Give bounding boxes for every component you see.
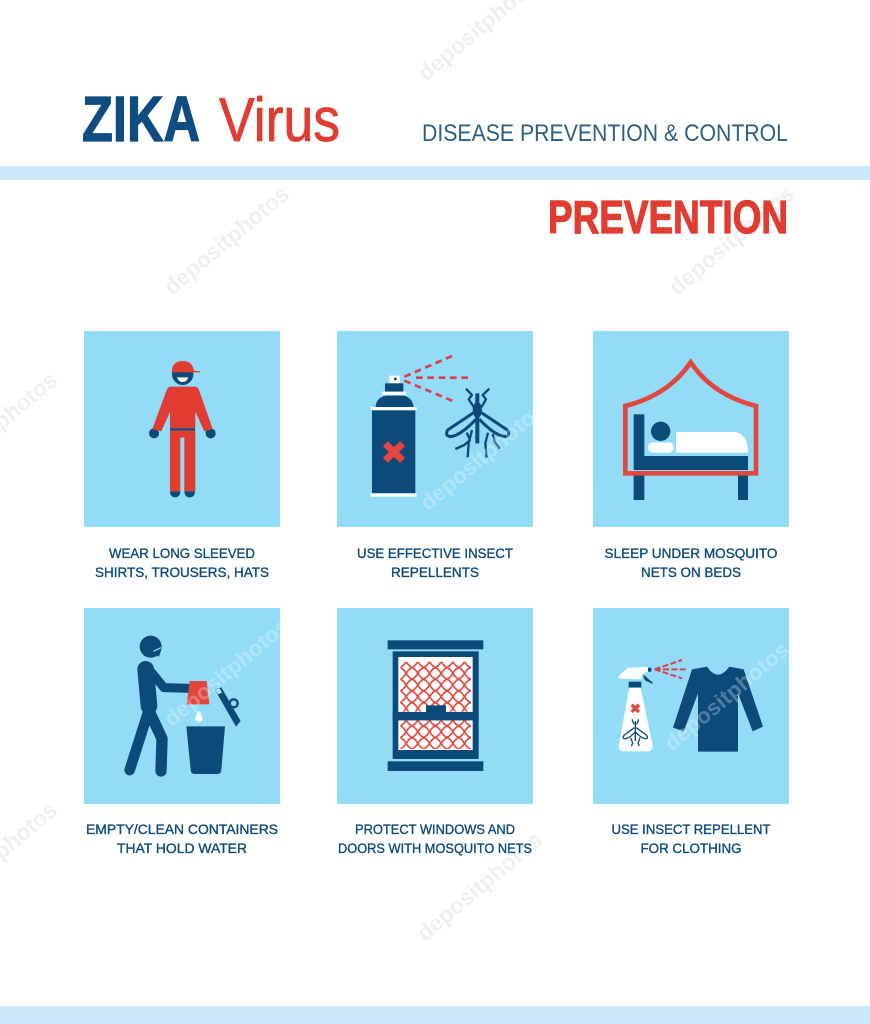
icon: person emptying container xyxy=(130,636,241,774)
caption: insect repellent xyxy=(357,545,513,580)
subtitle: DISEASE PREVENTION & CONTROL xyxy=(422,120,788,147)
caption: bed net: SLEEP UNDER MOSQUITO xyxy=(604,545,778,561)
panel: long clothing xyxy=(84,331,280,527)
caption: insect repellent: USE EFFECTIVE INSECT xyxy=(357,545,513,561)
icon: mosquito xyxy=(447,389,509,457)
header band xyxy=(0,166,870,180)
caption: long clothing: WEAR LONG SLEEVED xyxy=(109,545,255,561)
panel: clothing repellent xyxy=(593,608,789,804)
icon: spray bottle xyxy=(618,660,686,751)
caption: long clothing xyxy=(95,545,269,580)
caption: clothing repellent xyxy=(612,821,771,856)
section heading: PREVENTION xyxy=(548,191,788,243)
caption: empty containers xyxy=(86,821,278,856)
icon: bed under net xyxy=(625,362,756,500)
caption: window nets: PROTECT WINDOWS AND xyxy=(355,821,515,837)
icon: person in long clothes xyxy=(149,361,216,497)
caption: long clothing: SHIRTS, TROUSERS, HATS xyxy=(95,564,269,580)
watermarks: depositphotos xyxy=(412,827,547,946)
caption: empty containers: THAT HOLD WATER xyxy=(117,840,247,856)
watermarks: depositphotos xyxy=(664,181,799,300)
caption: clothing repellent: FOR CLOTHING xyxy=(640,840,742,856)
panel: insect repellent xyxy=(337,331,533,527)
icon: spray can xyxy=(371,355,469,497)
title: ZIKA xyxy=(82,83,200,155)
caption: window nets xyxy=(338,821,532,856)
title xyxy=(82,83,340,155)
panel watermarks: depositphotos xyxy=(415,397,550,516)
icon: long sleeved shirt xyxy=(673,667,763,752)
caption: empty containers: EMPTY/CLEAN CONTAINERS xyxy=(86,821,278,837)
icon: window with mosquito net xyxy=(388,640,483,771)
title: Virus xyxy=(219,86,340,155)
footer band xyxy=(0,1006,870,1024)
panel watermarks: depositphotos xyxy=(659,637,794,756)
panel watermarks xyxy=(159,397,794,756)
caption: bed net: NETS ON BEDS xyxy=(641,564,741,580)
caption: window nets: DOORS WITH MOSQUITO NETS xyxy=(338,840,532,856)
caption: clothing repellent: USE INSECT REPELLENT xyxy=(612,821,771,837)
panel watermarks: depositphotos xyxy=(159,613,294,732)
caption: insect repellent: REPELLENTS xyxy=(391,564,479,580)
panel: empty containers xyxy=(84,608,280,804)
watermarks: depositphotos xyxy=(159,181,294,300)
caption: bed net xyxy=(604,545,778,580)
panel: bed net xyxy=(593,331,789,527)
panel: window nets xyxy=(337,608,533,804)
